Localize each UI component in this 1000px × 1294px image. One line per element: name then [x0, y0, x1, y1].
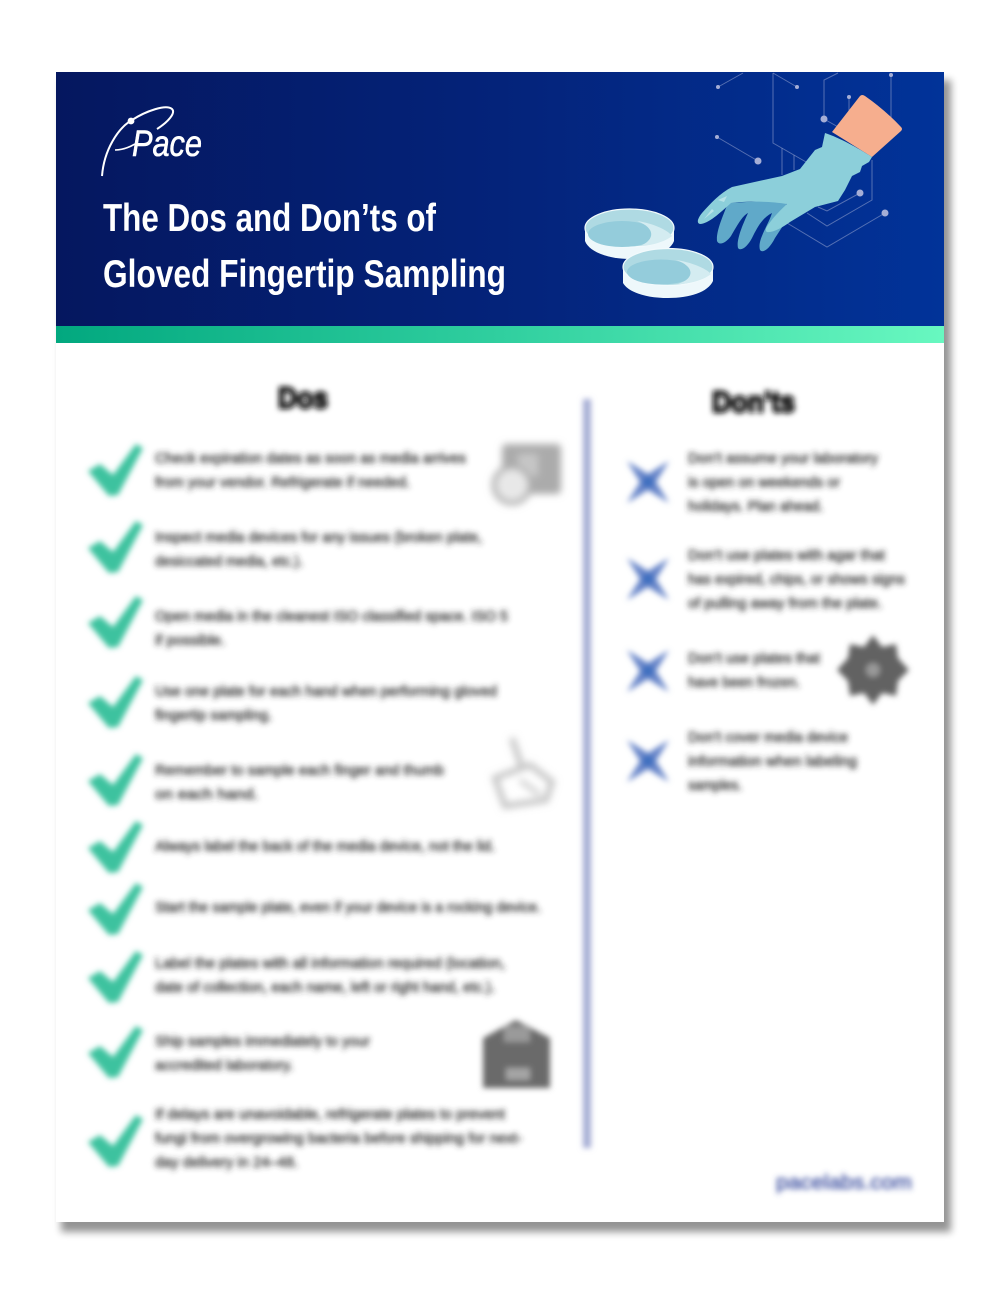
don'ts list text: Don’t cover media device — [688, 729, 848, 746]
dos list text: from your vendor. Refrigerate if needed. — [155, 474, 410, 491]
page shadow — [61, 80, 951, 1232]
dos list text: fungi from overgrowing bacteria before shipping for next- — [155, 1130, 522, 1147]
header banner — [56, 72, 944, 343]
dos list text: Start the sample plate, even if your device is a rocking device. — [155, 899, 541, 916]
logo: Pace — [102, 107, 202, 176]
don'ts list text: Don’t assume your laboratory — [688, 450, 878, 467]
dos list text: Always label the back of the media device, not the lid. — [155, 838, 495, 855]
dos list text: Label the plates with all information required (location, — [155, 955, 505, 972]
logo: Pace: Pace — [132, 123, 202, 164]
don'ts list text: Don’t use plates that — [688, 650, 821, 667]
don'ts list text — [688, 450, 905, 794]
dos list text: Inspect media devices for any issues (broken plate, — [155, 529, 482, 546]
illustration: gloved hand — [698, 95, 902, 251]
website link: pacelabs.com — [776, 1172, 912, 1194]
accent bar — [56, 326, 944, 343]
dos list text: Check expiration dates as soon as media arrives — [155, 450, 466, 467]
dos list text: Remember to sample each finger and thumb — [155, 762, 444, 779]
illustration: petri dishes — [585, 209, 713, 298]
dos list text: If delays are unavoidable, refrigerate plates to prevent — [155, 1106, 506, 1123]
dos list text: accredited laboratory. — [155, 1057, 293, 1074]
x icons — [627, 461, 669, 782]
dos list text: if possible. — [155, 632, 225, 649]
heading: Dos: Dos — [278, 382, 328, 415]
check icons — [88, 444, 143, 1167]
icon: calendar and clock — [494, 444, 561, 503]
glove — [698, 133, 872, 232]
title: The Dos and Don’ts of — [103, 197, 437, 240]
dos list text: Ship samples immediately to your — [155, 1033, 370, 1050]
don'ts list text: holidays. Plan ahead. — [688, 498, 823, 515]
dish front — [623, 248, 713, 298]
don'ts list text: have been frozen. — [688, 674, 800, 691]
dos list text: on each hand. — [155, 786, 258, 803]
glove highlights — [704, 196, 727, 219]
dos list text: day delivery in 24–48. — [155, 1154, 298, 1171]
dos list text — [155, 450, 541, 1171]
rear fingers — [717, 200, 790, 251]
title: Gloved Fingertip Sampling — [103, 253, 506, 296]
don'ts list text: samples. — [688, 777, 742, 794]
don'ts list text: information when labeling — [688, 753, 857, 770]
icon: hand thumb — [495, 738, 552, 806]
heading: Don'ts: Don’ts — [712, 386, 795, 419]
circuit line pattern — [715, 73, 893, 247]
page sheet — [56, 72, 944, 1222]
title — [103, 197, 506, 296]
don'ts list text: is open on weekends or — [688, 474, 840, 491]
dos list text: desiccated media, etc.). — [155, 553, 303, 570]
icon: shipping box — [483, 1020, 550, 1088]
dos list text: fingertip sampling. — [155, 707, 272, 724]
dish rear — [585, 209, 674, 259]
dos list text: date of collection, each name, left or right hand, etc.). — [155, 979, 495, 996]
icon: frozen gear — [837, 635, 909, 705]
dos list text: Open media in the cleanest ISO classified space. ISO 5 — [155, 608, 508, 625]
don'ts list text: Don’t use plates with agar that — [688, 547, 886, 564]
forearm — [832, 95, 902, 157]
divider — [583, 399, 591, 1148]
don'ts list text: of pulling away from the plate. — [688, 595, 882, 612]
don'ts list text: has expired, chips, or shows signs — [688, 571, 905, 588]
dos list text: Use one plate for each hand when performing gloved — [155, 683, 497, 700]
